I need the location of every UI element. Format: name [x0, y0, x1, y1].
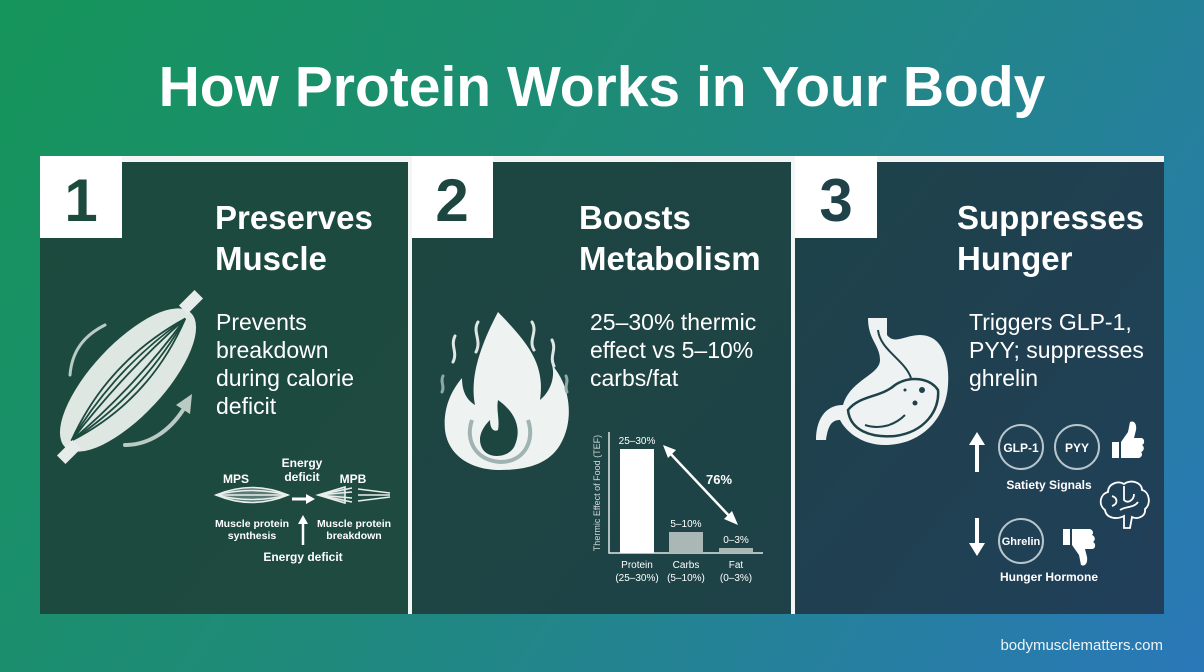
icon: thumbs up	[1112, 421, 1144, 458]
satiety signals: Satiety Signals	[1006, 478, 1092, 492]
body text 2: 25–30% thermic	[590, 309, 756, 335]
bar chart: thermic effect: 0–3%	[723, 535, 749, 546]
diagram: MPS vs MPB: Energy deficit	[263, 550, 343, 564]
heading 1: Preserves	[215, 199, 373, 236]
bar chart: thermic effect: Protein	[621, 560, 653, 571]
panel: boosts metabolism	[412, 156, 791, 614]
heading 2: Boosts	[579, 199, 691, 236]
body text 1: during calorie	[216, 365, 354, 391]
diagram: MPS vs MPB: MPB	[340, 472, 367, 486]
body text 2: effect vs 5–10%	[590, 337, 753, 363]
heading 1: Muscle	[215, 240, 327, 277]
icon: muscle	[39, 288, 217, 472]
satiety signals	[969, 421, 1144, 492]
panel: preserves muscle	[39, 156, 408, 614]
panel: suppresses hunger	[795, 156, 1164, 614]
bar chart: thermic effect: (25–30%)	[615, 573, 659, 584]
bar chart: thermic effect: Fat	[729, 560, 743, 571]
satiety signals: PYY	[1065, 441, 1089, 455]
diagram: MPS vs MPB	[215, 456, 391, 564]
body text 3: ghrelin	[969, 365, 1038, 391]
number box 2: 2	[435, 167, 469, 234]
number box 3: 3	[819, 167, 853, 234]
number box 3	[795, 156, 877, 238]
footer: website: bodymusclematters.com	[1000, 637, 1163, 654]
number box 2	[412, 156, 493, 238]
bar chart: thermic effect: (5–10%)	[667, 573, 705, 584]
number box 1: 1	[64, 167, 98, 234]
hunger hormone: Hunger Hormone	[1000, 570, 1098, 584]
bar chart: thermic effect	[592, 432, 763, 584]
body text 3: PYY; suppresses	[969, 337, 1144, 363]
panels frame	[39, 156, 1164, 614]
title: How Protein Works in Your Body	[159, 55, 1046, 119]
body text 1: deficit	[216, 393, 277, 419]
heading 2: Metabolism	[579, 240, 761, 277]
icon: flame	[442, 312, 569, 470]
diagram: MPS vs MPB: Muscle protein	[215, 518, 289, 530]
diagram: MPS vs MPB: Energy	[282, 456, 323, 470]
bar chart: thermic effect: Carbs	[673, 560, 699, 571]
heading 3: Hunger	[957, 240, 1073, 277]
bar chart: thermic effect: 25–30%	[619, 436, 655, 447]
diagram: MPS vs MPB: MPS	[223, 472, 249, 486]
number box 1	[40, 156, 122, 238]
diagram: MPS vs MPB: breakdown	[326, 530, 382, 542]
diagram: MPS vs MPB: Muscle protein	[317, 518, 391, 530]
body text 3: Triggers GLP-1,	[969, 309, 1132, 335]
bar chart: thermic effect: 76%	[706, 472, 732, 487]
bar chart: thermic effect: (0–3%)	[720, 573, 752, 584]
bar chart: thermic effect: 5–10%	[670, 519, 702, 530]
diagram: MPS vs MPB: deficit	[284, 470, 320, 484]
body text 2: carbs/fat	[590, 365, 679, 391]
heading 3: Suppresses	[957, 199, 1144, 236]
body text 1: breakdown	[216, 337, 329, 363]
bar chart: thermic effect: Thermic Effect of Food (TEF)	[592, 435, 602, 551]
hunger hormone: Ghrelin	[1002, 536, 1041, 548]
diagram: MPS vs MPB: synthesis	[228, 530, 276, 542]
icon: brain	[1101, 482, 1149, 528]
icon: stomach	[816, 318, 948, 445]
body text 1: Prevents	[216, 309, 307, 335]
satiety signals: GLP-1	[1003, 441, 1039, 455]
icon: thumbs down	[1063, 529, 1095, 566]
hunger hormone	[969, 518, 1098, 584]
